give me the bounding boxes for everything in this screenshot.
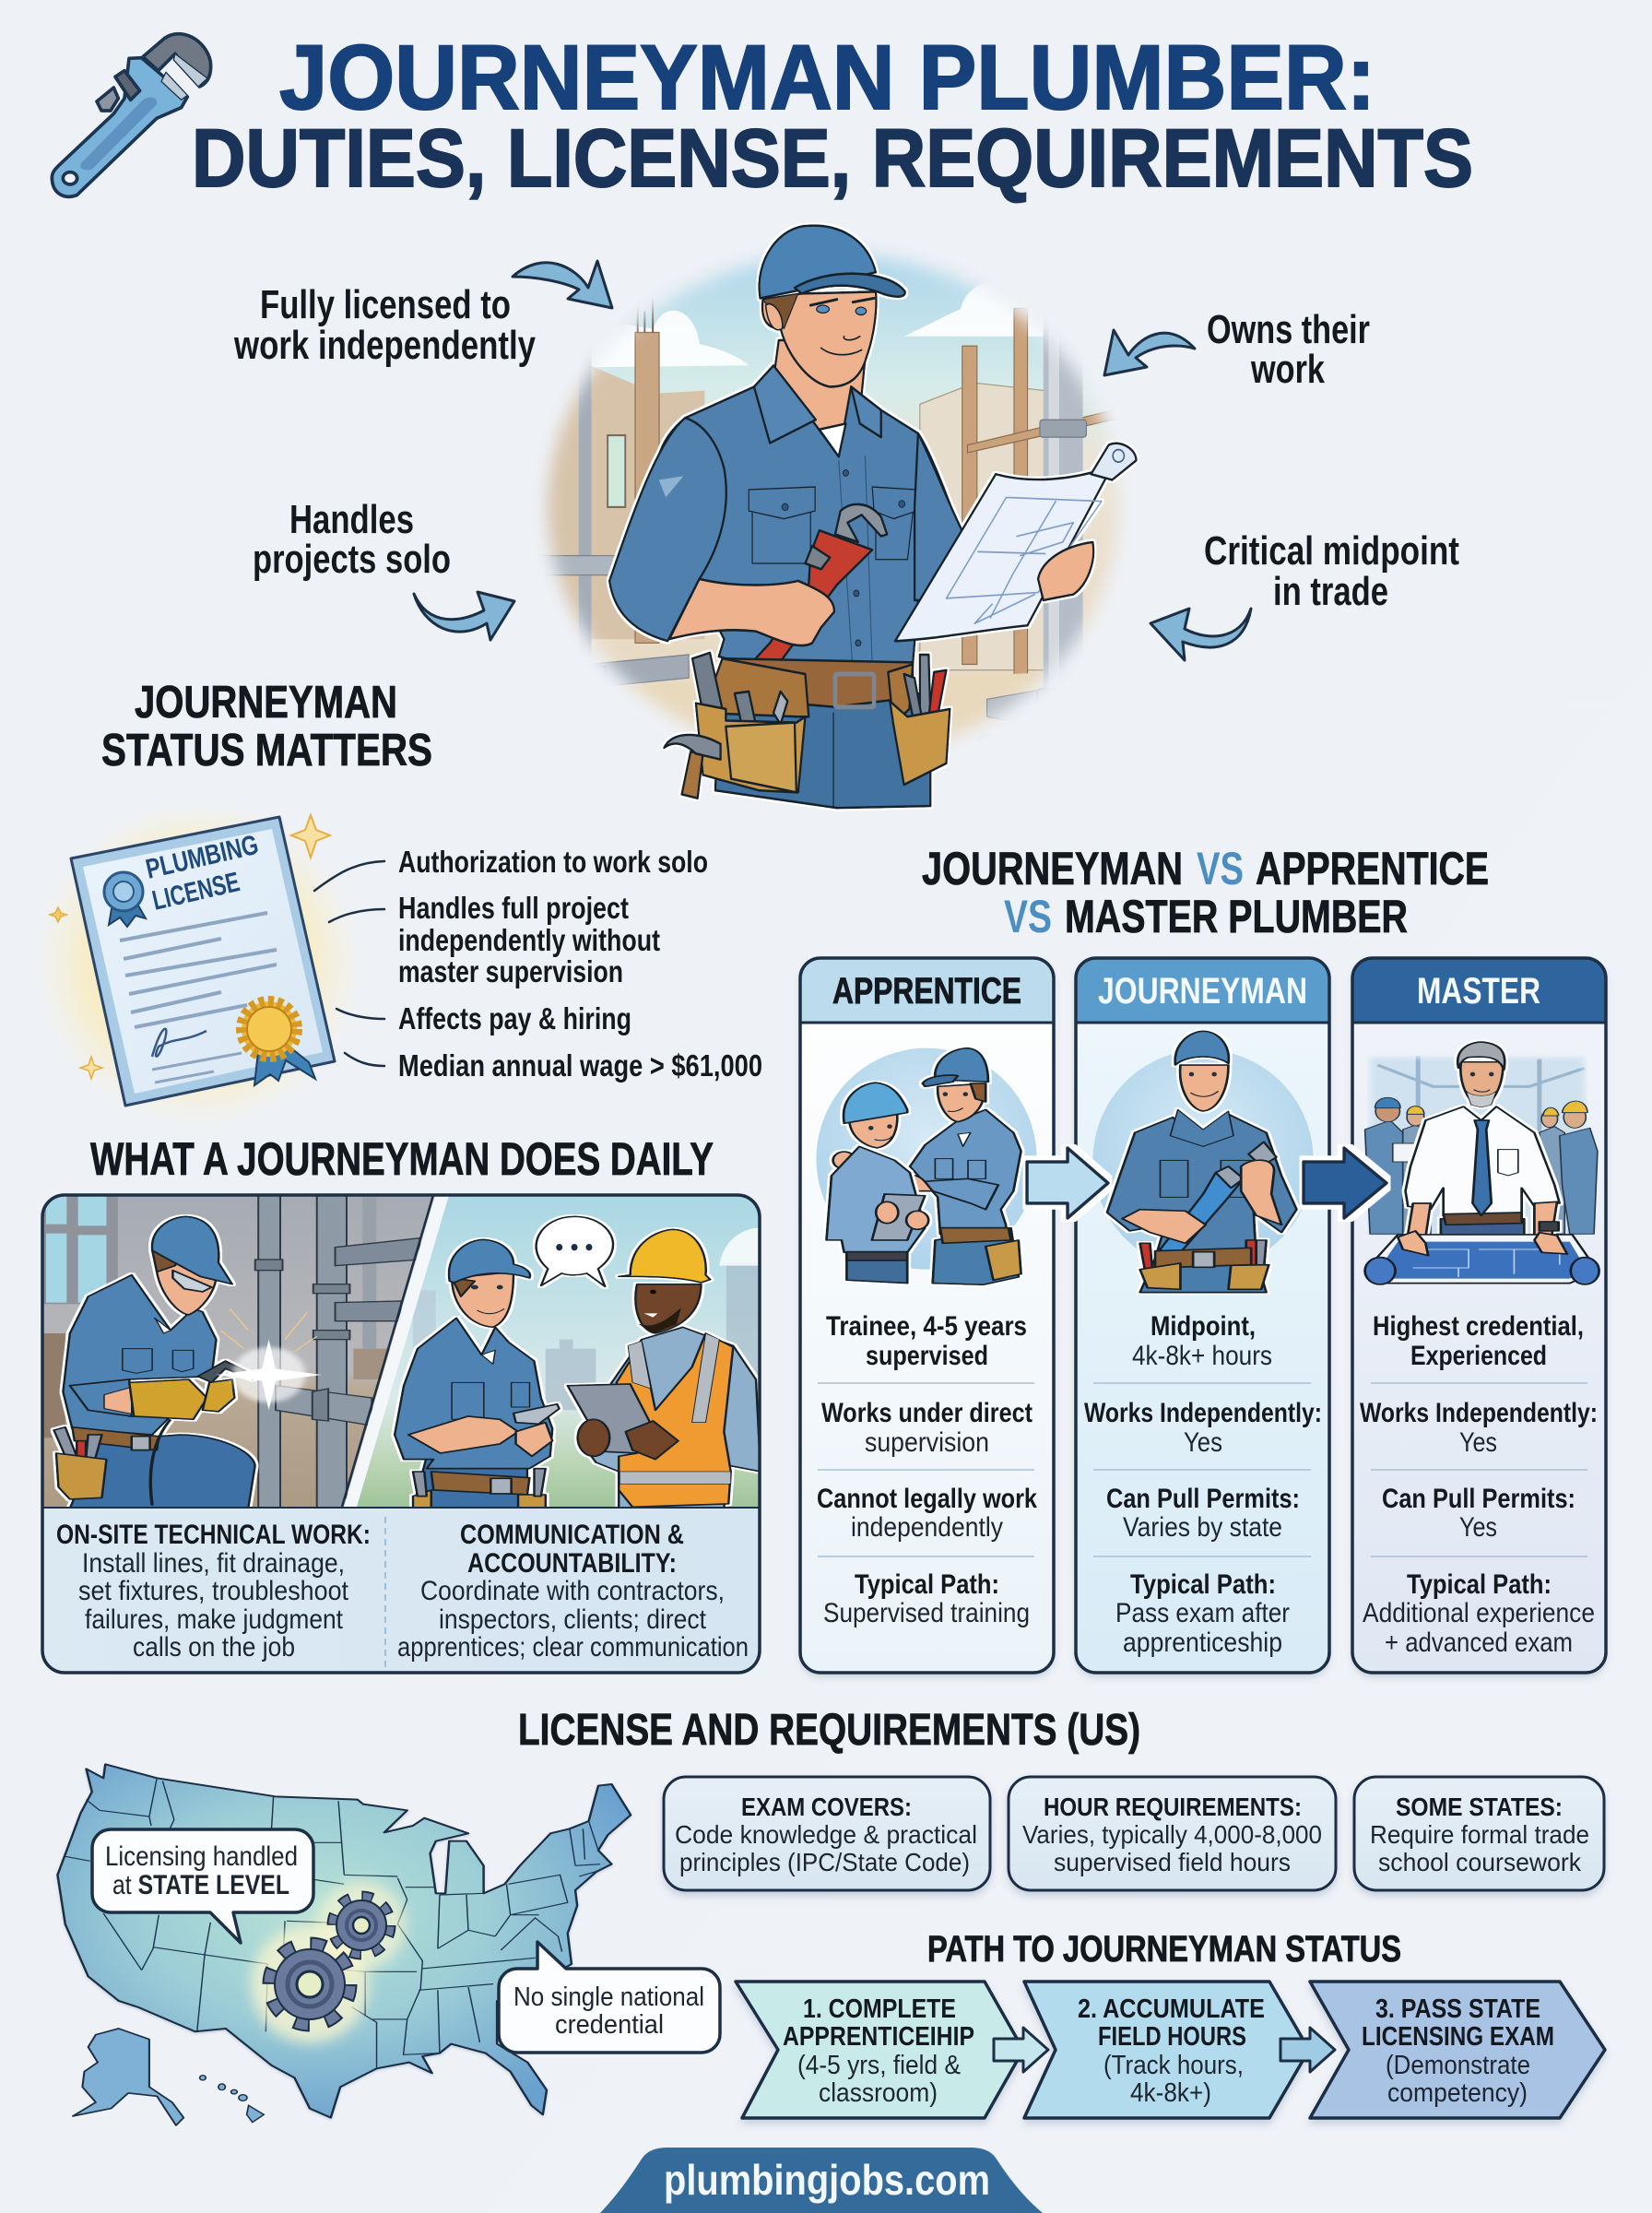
- map: united states with gears: [57, 1764, 720, 2125]
- arrow: to hero from top right: [1104, 330, 1195, 375]
- box: hour requirements: HOUR REQUIREMENTS:: [1044, 1793, 1302, 1821]
- blueprint roll: [1365, 1231, 1599, 1284]
- collar: [754, 365, 816, 443]
- header: master: MASTER: [1417, 971, 1540, 1012]
- benefit connectors: [314, 861, 384, 1066]
- facts: master: Works Independently:: [1360, 1398, 1598, 1428]
- welder: [53, 1216, 257, 1509]
- box: exam covers: principles (IPC/State Code): [679, 1848, 970, 1876]
- scene: on-site technical work: [42, 1195, 441, 1509]
- step 1: complete apprenticeship: 1. COMPLETE: [803, 1994, 956, 2024]
- box: hour requirements: Varies, typically 4,000-8,000: [1022, 1820, 1322, 1849]
- step 3: pass state licensing exam: LICENSING EXAM: [1362, 2022, 1554, 2052]
- step 1: complete apprenticeship: classroom): [819, 2078, 938, 2108]
- left pouch and tools: [702, 658, 808, 716]
- weld spark: [217, 1308, 322, 1410]
- benefits list: [398, 845, 762, 1083]
- panel: master: [1352, 958, 1606, 1673]
- hero illustration: journeyman plumber on site: [530, 226, 1137, 808]
- heading: journeyman vs apprentice vs master plumber: APPRENTICE: [1256, 843, 1489, 894]
- step 3: pass state licensing exam: (Demonstrate: [1386, 2051, 1530, 2080]
- heading: journeyman status matters: JOURNEYMAN: [135, 678, 397, 728]
- shirt torso: [655, 367, 961, 670]
- text: on-site technical work: ON-SITE TECHNICAL WORK:: [56, 1520, 371, 1550]
- pipe wrench, red: [747, 504, 887, 679]
- heading: path to journeyman status: PATH TO JOURNEYMAN STATUS: [927, 1929, 1401, 1970]
- text: on-site technical work: set fixtures, troubleshoot: [78, 1576, 349, 1606]
- state lines: [65, 1778, 600, 2068]
- callout: handles projects solo: Handles: [289, 497, 414, 542]
- callout: critical midpoint: Critical midpoint: [1204, 528, 1459, 574]
- benefits list: master supervision: [398, 954, 623, 988]
- facts: journeyman: Can Pull Permits:: [1106, 1484, 1300, 1514]
- contiguous states: [57, 1764, 631, 2118]
- facts: master: Additional experience: [1363, 1598, 1595, 1628]
- step 3: pass state licensing exam: competency): [1387, 2078, 1528, 2108]
- far hand: [1038, 542, 1093, 600]
- box: some states: school coursework: [1378, 1848, 1582, 1876]
- heading: license and requirements: LICENSE AND REQUIREMENTS (US): [518, 1706, 1140, 1755]
- facts: journeyman: [1084, 1311, 1322, 1658]
- text: on-site technical work: [56, 1520, 371, 1663]
- benefits list: Handles full project: [398, 891, 629, 925]
- facts: master: Yes: [1459, 1512, 1497, 1543]
- speech bubble: [537, 1216, 613, 1286]
- box: some states: Require formal trade: [1370, 1820, 1589, 1849]
- facts: journeyman: Typical Path:: [1130, 1569, 1276, 1600]
- footer tab: plumbingjobs.com: plumbingjobs.com: [664, 2156, 990, 2204]
- icon: plumbing license certificate: PLUMBING: [143, 830, 261, 885]
- text: communication and accountability: [397, 1520, 749, 1663]
- step 1: complete apprenticeship: [736, 1982, 1023, 2118]
- illustration: journeyman with wrench: [1093, 1031, 1314, 1293]
- glow: [32, 798, 364, 1130]
- callout: no single national credential: [499, 1942, 720, 2053]
- arrow: to hero from lower left: [414, 592, 514, 640]
- scene background: [538, 247, 1125, 747]
- arrow: journeyman to master: [1304, 1148, 1386, 1218]
- illustration: master with blueprint: [1365, 1042, 1599, 1284]
- certificate sheet: [71, 817, 335, 1106]
- heading: journeyman status matters: [101, 678, 432, 775]
- text: communication and accountability: inspectors, clients; direct: [439, 1604, 707, 1635]
- step 2: accumulate field hours: 4k-8k+): [1130, 2078, 1211, 2108]
- apprentice: [826, 1083, 928, 1284]
- step 2: accumulate field hours: FIELD HOURS: [1098, 2022, 1246, 2052]
- gold seal: [254, 1044, 315, 1085]
- background crew: [1365, 1097, 1598, 1234]
- plumber with tablet: [395, 1239, 560, 1509]
- legs and trousers: [715, 693, 930, 808]
- callout: licensing handled at state level: at STATE LEVEL: [112, 1870, 289, 1900]
- blue rosette: [109, 899, 146, 927]
- panel: journeyman: [1076, 958, 1329, 1673]
- facts: master: Typical Path:: [1407, 1569, 1552, 1600]
- cap: [760, 226, 876, 298]
- neck: [773, 340, 867, 456]
- arrow: apprentice to journeyman: [1027, 1148, 1108, 1218]
- box: hour requirements: supervised field hours: [1054, 1848, 1291, 1876]
- callout: fully licensed: Fully licensed to: [260, 282, 511, 327]
- alaska: [73, 2029, 183, 2125]
- blueprint: [895, 467, 1112, 641]
- heading: journeyman vs apprentice vs master plumber: VS: [1197, 843, 1244, 894]
- gears: [251, 1881, 406, 2043]
- arrow: step 1 to step 2: [994, 2028, 1048, 2072]
- box: exam covers: Code knowledge & practical: [675, 1820, 977, 1849]
- icon: pipe wrench: [52, 34, 211, 196]
- callout: fully licensed: work independently: [233, 323, 536, 368]
- header: apprentice: APPRENTICE: [832, 971, 1021, 1012]
- callout: owns their work: [1207, 307, 1370, 392]
- facts: apprentice: Typical Path:: [855, 1569, 999, 1600]
- far arm sleeve: [914, 433, 964, 600]
- box: some states: SOME STATES:: [1396, 1793, 1563, 1821]
- callout: fully licensed: [233, 282, 536, 368]
- box: exam covers: EXAM COVERS:: [741, 1793, 912, 1821]
- text: on-site technical work: calls on the job: [133, 1632, 295, 1663]
- panel: apprentice: [800, 958, 1054, 1673]
- facts: journeyman: Midpoint,: [1150, 1311, 1256, 1342]
- facts: apprentice: Supervised training: [823, 1598, 1030, 1628]
- facts: apprentice: Cannot legally work: [817, 1484, 1037, 1514]
- text: communication and accountability: COMMUNICATION &: [460, 1520, 684, 1550]
- title: JOURNEYMAN PLUMBER:: [279, 26, 1375, 128]
- text: communication and accountability: Coordinate with contractors,: [420, 1576, 725, 1606]
- undershirt: [820, 423, 845, 456]
- facts: apprentice: supervision: [865, 1427, 989, 1458]
- box: some states: [1354, 1777, 1604, 1890]
- callout: critical midpoint: [1204, 528, 1459, 614]
- facts: apprentice: supervised: [866, 1341, 988, 1371]
- callout: owns their work: work: [1250, 347, 1325, 392]
- callout: licensing handled at state level: [92, 1829, 313, 1943]
- title: [192, 26, 1473, 204]
- header: journeyman: JOURNEYMAN: [1098, 971, 1307, 1012]
- chest pockets: [749, 487, 815, 563]
- callout: no single national credential: credential: [555, 2010, 664, 2040]
- facts: master: + advanced exam: [1385, 1627, 1573, 1658]
- scene: communication: [344, 1195, 765, 1509]
- head: [762, 291, 876, 386]
- facts: journeyman: apprenticeship: [1123, 1627, 1282, 1658]
- heading: journeyman vs apprentice vs master plumber: VS: [1004, 891, 1052, 942]
- hawaii: [200, 2076, 264, 2123]
- figure: [609, 226, 1136, 808]
- benefits list: Affects pay & hiring: [398, 1001, 631, 1035]
- title: DUTIES, LICENSE, REQUIREMENTS: [192, 112, 1473, 204]
- panel: daily duties: [42, 1195, 765, 1673]
- heading: journeyman status matters: STATUS MATTERS: [101, 726, 432, 775]
- heading: journeyman vs apprentice vs master plumber: MASTER PLUMBER: [1065, 891, 1408, 942]
- footer tab: plumbingjobs.com: [600, 2148, 1043, 2213]
- benefits list: independently without: [398, 923, 660, 957]
- facts: journeyman: 4k-8k+ hours: [1132, 1341, 1272, 1371]
- icon: plumbing license certificate: [32, 798, 364, 1130]
- text: on-site technical work: failures, make judgment: [85, 1604, 344, 1635]
- header: master: [1352, 958, 1606, 1023]
- facts: apprentice: [817, 1311, 1037, 1628]
- icon: plumbing license certificate: LICENSE: [149, 867, 242, 917]
- right pouch and tools: [888, 664, 913, 725]
- mentor: [895, 1048, 1021, 1284]
- step 3: pass state licensing exam: [1310, 1982, 1605, 2118]
- benefits list: Authorization to work solo: [398, 845, 708, 879]
- facts: master: Can Pull Permits:: [1382, 1484, 1575, 1514]
- callout: owns their work: Owns their: [1207, 307, 1370, 352]
- step 2: accumulate field hours: [1024, 1982, 1309, 2118]
- step 2: accumulate field hours: 2. ACCUMULATE: [1078, 1994, 1265, 2024]
- callout: handles projects solo: projects solo: [253, 537, 451, 582]
- heading: journeyman vs apprentice vs master plumber: [922, 843, 1489, 942]
- facts: apprentice: Works under direct: [821, 1398, 1032, 1428]
- facts: master: Highest credential,: [1373, 1311, 1584, 1342]
- step 2: accumulate field hours: (Track hours,: [1103, 2051, 1244, 2080]
- facts: apprentice: Trainee, 4-5 years: [826, 1311, 1027, 1342]
- arrow: to hero from lower right: [1150, 609, 1251, 660]
- facts: master: Experienced: [1410, 1341, 1547, 1371]
- facts: apprentice: independently: [851, 1512, 1003, 1543]
- callout: no single national credential: No single national: [513, 1982, 704, 2012]
- text: communication and accountability: ACCOUNTABILITY:: [467, 1548, 677, 1579]
- step 3: pass state licensing exam: 3. PASS STATE: [1375, 1994, 1540, 2024]
- facts: master: Yes: [1459, 1427, 1497, 1458]
- header: apprentice: [800, 958, 1054, 1023]
- heading: what a journeyman does daily: WHAT A JOURNEYMAN DOES DAILY: [90, 1133, 714, 1185]
- contractor in hard hat: [568, 1229, 761, 1509]
- callout: handles projects solo: [253, 497, 451, 582]
- box: hour requirements: [1009, 1777, 1336, 1890]
- heading: journeyman vs apprentice vs master plumber: JOURNEYMAN: [922, 843, 1183, 894]
- illustration: apprentice and mentor: [816, 1048, 1037, 1284]
- header: journeyman: [1076, 958, 1329, 1023]
- callout: critical midpoint: in trade: [1273, 569, 1388, 614]
- facts: journeyman: Varies by state: [1123, 1512, 1282, 1543]
- arrow: step 2 to step 3: [1280, 2028, 1335, 2072]
- step 1: complete apprenticeship: APPRENTICEIHIP: [783, 2022, 974, 2052]
- text: on-site technical work: Install lines, fit drainage,: [82, 1548, 345, 1579]
- facts: journeyman: Works Independently:: [1084, 1398, 1322, 1428]
- hammer: [682, 751, 702, 799]
- callout: licensing handled at state level: Licensing handled: [105, 1841, 298, 1872]
- tool belt: [723, 658, 913, 707]
- near arm sleeve: [609, 418, 726, 641]
- facts: master: [1360, 1311, 1598, 1658]
- benefits list: Median annual wage > $61,000: [398, 1048, 762, 1083]
- facts: journeyman: Yes: [1184, 1427, 1222, 1458]
- box: exam covers: [664, 1777, 990, 1890]
- step 1: complete apprenticeship: (4-5 yrs, field &: [797, 2051, 961, 2080]
- arrow: to hero from top left: [513, 261, 612, 308]
- facts: journeyman: Pass exam after: [1115, 1598, 1290, 1628]
- text: communication and accountability: apprentices; clear communication: [397, 1632, 749, 1663]
- forearm and hand: [669, 579, 834, 645]
